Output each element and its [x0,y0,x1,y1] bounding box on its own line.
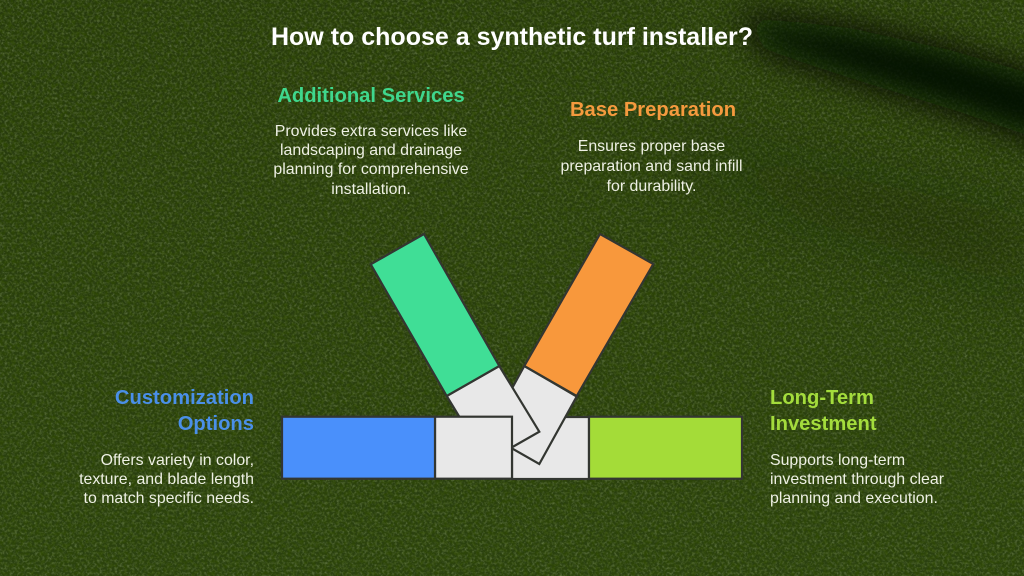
description: customization options [79,452,254,507]
description: long-term investment: investment through clear [770,471,944,488]
text block: additional services [273,85,469,198]
description: long-term investment: Supports long-term [770,452,905,469]
heading: long-term investment: Investment [770,413,877,435]
description: customization options: texture, and blade length [79,471,254,488]
heading: long-term investment: Long-Term [770,387,874,409]
description: additional services: Provides extra services like [275,123,467,140]
arm: green grey connector [447,366,539,462]
text block: long-term investment [770,387,944,507]
description: base preparation: Ensures proper base [578,138,725,155]
description: additional services: planning for comprehensive [273,161,469,178]
arm: right grey connector [512,417,589,479]
heading: additional services: Additional Services [277,85,465,107]
description: additional services: installation. [331,181,411,198]
bar: blue customization [282,417,435,479]
heading: customization options [115,387,254,435]
arm: left grey connector [435,417,512,479]
arm: orange grey connector [487,366,577,464]
description: additional services: landscaping and drainage [280,142,462,159]
bar: green additional services [371,234,499,396]
text block: base preparation [560,99,742,195]
description: base preparation: preparation and sand infill [560,158,742,175]
bar: orange base preparation [524,234,653,396]
description: base preparation [560,138,742,195]
description: long-term investment: planning and execution. [770,490,938,507]
heading: customization options: Customization [115,387,254,409]
title: How to choose a synthetic turf installer? [271,23,753,51]
heading: customization options: Options [178,413,254,435]
heading: base preparation: Base Preparation [570,99,736,121]
description: customization options: to match specific needs. [84,490,254,507]
description: long-term investment [770,452,944,507]
description: base preparation: for durability. [607,178,696,195]
bar: lime long-term [589,417,742,479]
heading: long-term investment [770,387,877,435]
text block: customization options [79,387,254,507]
description: additional services [273,123,469,198]
description: customization options: Offers variety in color, [101,452,254,469]
